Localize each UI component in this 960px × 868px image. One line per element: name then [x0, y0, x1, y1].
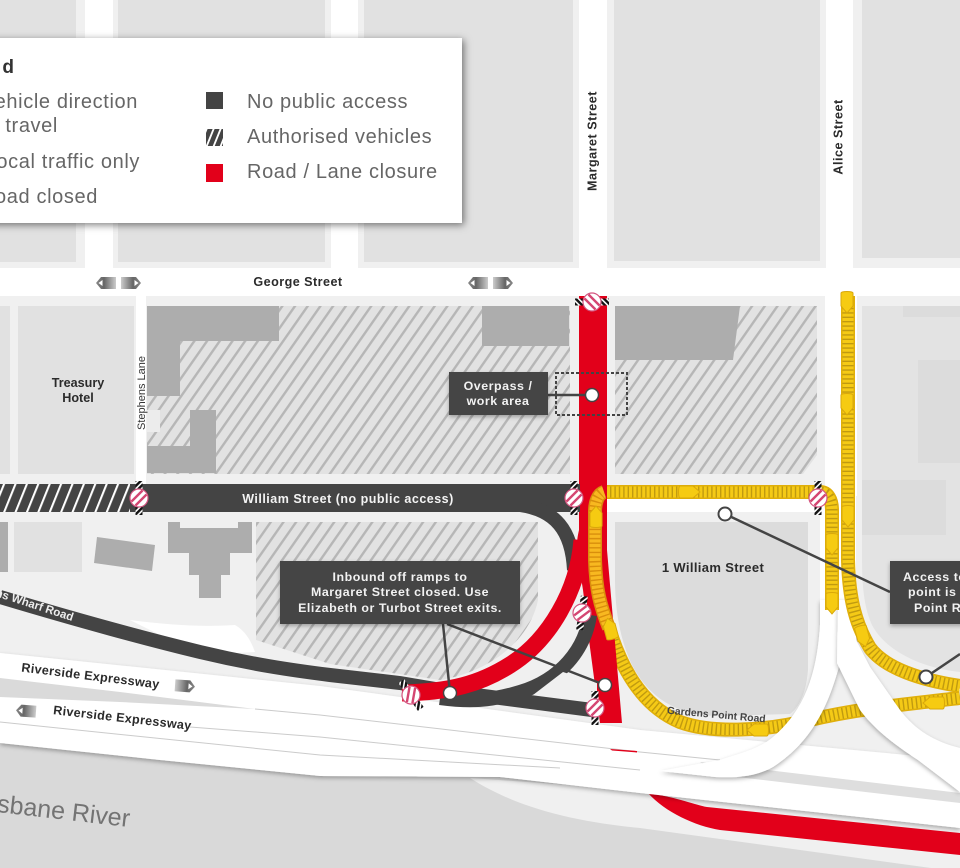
construction site hatched north-east: [615, 306, 817, 474]
legend panel: [0, 38, 462, 223]
street and place labels: [0, 91, 846, 833]
access point callout: [718, 508, 960, 684]
William Street no public access: [0, 484, 580, 512]
direction markers on yellow routes: [590, 292, 944, 736]
traffic direction arrows: [16, 277, 513, 718]
red off ramp: [402, 540, 582, 693]
wedge between ramps: [533, 672, 597, 703]
yellow local traffic route: William Street and Alice Street: [607, 296, 960, 686]
city blocks: [0, 0, 960, 572]
expressway carriageways: [0, 653, 960, 828]
overpass work area callout: Overpass /: [464, 379, 532, 393]
street and place labels: Treasury: [52, 376, 104, 390]
1 William Street block: [615, 522, 808, 716]
yellow local traffic route in Margaret Street: [595, 492, 609, 628]
street and place labels: Gardens Point Road: [666, 706, 766, 725]
white patch above wharf road: [130, 620, 255, 655]
dark ramp and wharf road: [0, 505, 592, 710]
street and place labels: Stephens Lane: [136, 356, 148, 430]
road closed markers: [130, 293, 827, 725]
streets: [0, 0, 960, 625]
curved road from Alice Street to west: [660, 600, 840, 777]
street and place labels: William Street (no public access): [242, 492, 454, 506]
inbound off ramps callout: Inbound off ramps to: [333, 570, 467, 584]
legend panel: Road / Lane closure: [247, 161, 438, 183]
river: [0, 740, 960, 868]
street and place labels: Riverside Expressway: [21, 661, 160, 691]
street and place labels: Hotel: [62, 391, 94, 405]
street and place labels: George Street: [253, 275, 343, 289]
site south of William Street: [0, 522, 538, 680]
overpass work area callout: [449, 372, 627, 415]
curved road from Alice Street to east: [837, 600, 960, 792]
inbound off ramps callout: Elizabeth or Turbot Street exits.: [298, 601, 502, 615]
legend panel: Authorised vehicles: [247, 126, 432, 148]
street and place labels: Margaret Street: [586, 91, 600, 191]
inbound off ramps callout: [280, 561, 612, 700]
legend panel: No public access: [247, 91, 408, 113]
thin red sliver between carriageways: [610, 749, 637, 752]
street and place labels: 1 William Street: [662, 560, 764, 575]
street and place labels: Alice Street: [832, 99, 846, 175]
inbound off ramps callout: Margaret Street closed. Use: [311, 585, 489, 599]
Margaret Street red closure: [577, 296, 622, 723]
yellow local traffic route: Gardens Point Road: [608, 625, 960, 730]
bottom red closure: [648, 793, 960, 855]
block east of Alice Street: [862, 306, 960, 672]
overpass work area callout: work area: [466, 394, 529, 408]
street and place labels: Riverside Expressway: [53, 703, 192, 733]
construction site hatched north-west: [147, 306, 570, 474]
